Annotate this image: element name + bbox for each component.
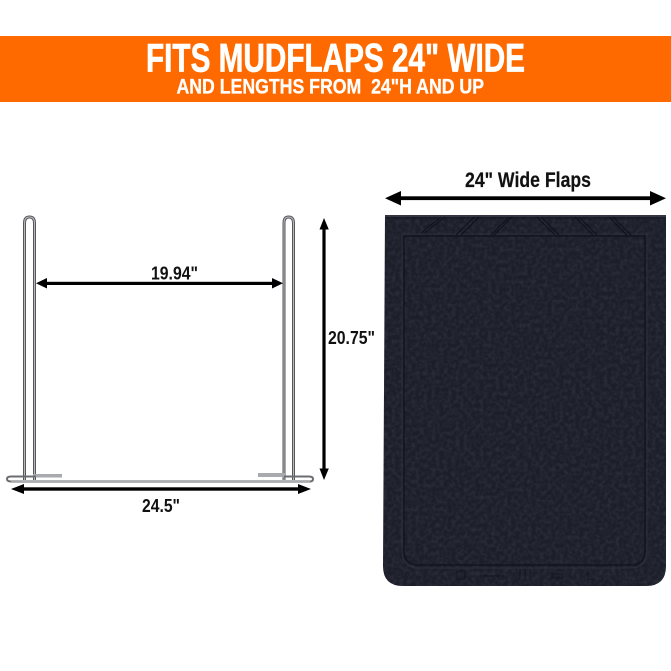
bottom tabs (33, 473, 285, 478)
bottom bar (7, 476, 313, 482)
label: rack height: 20.75" (328, 327, 375, 348)
label: inner width: 19.94" (151, 262, 198, 284)
ribs (421, 217, 631, 235)
wire rack (7, 217, 313, 482)
arrow: flap width (385, 191, 666, 206)
left hairpin (24, 217, 34, 480)
inner raised border (404, 236, 645, 565)
right hairpin (284, 217, 294, 480)
molded text (457, 569, 594, 579)
mudflap (383, 215, 666, 586)
arrow: rack width (11, 484, 311, 494)
label: rack width: 24.5" (142, 495, 180, 516)
arrow: inner width (36, 278, 283, 288)
banner subtitle: AND LENGTHS FROM 24"H AND UP (176, 74, 484, 98)
banner (0, 36, 671, 102)
banner title: FITS MUDFLAPS 24" WIDE (146, 36, 525, 80)
label: flap width: 24" Wide Flaps (465, 169, 591, 192)
arrow: rack height (320, 218, 329, 480)
